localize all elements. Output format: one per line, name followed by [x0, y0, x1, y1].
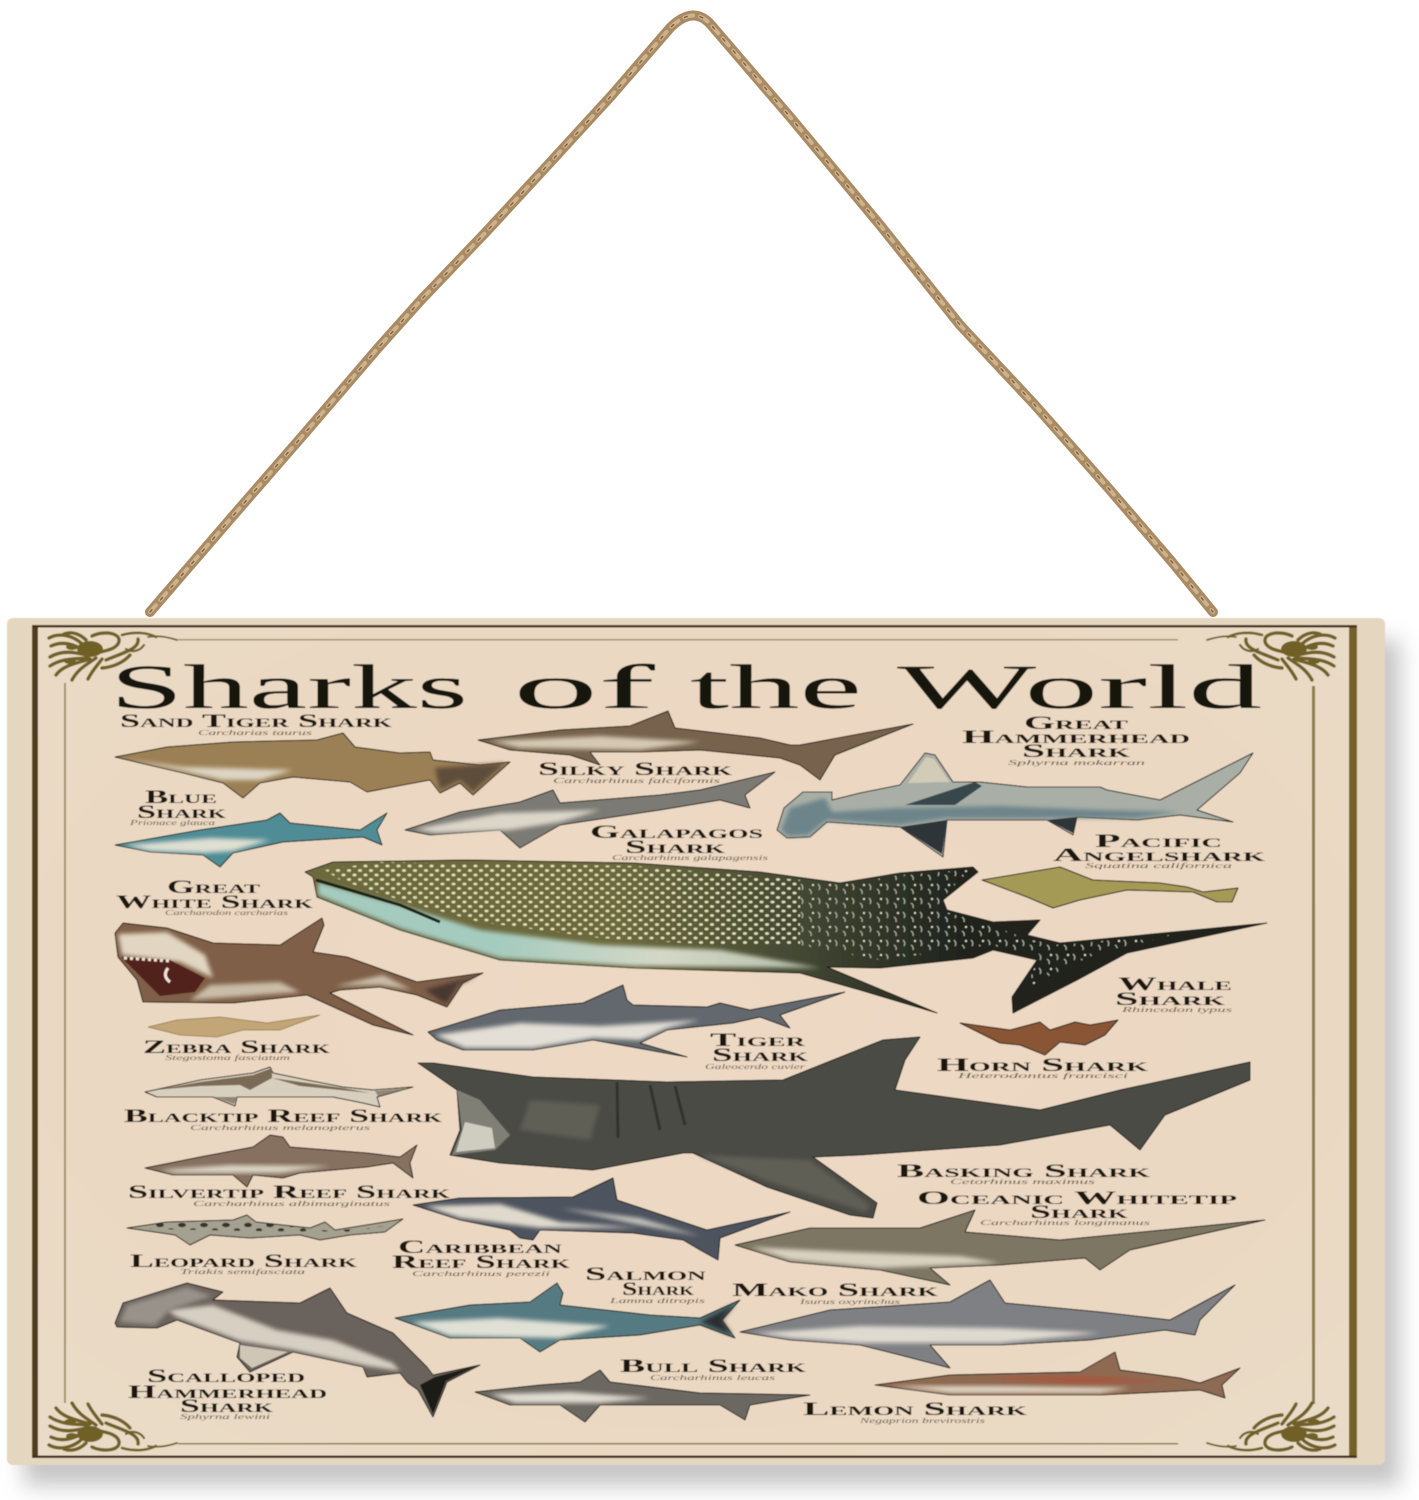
label: salmon shark: Shark	[622, 1279, 695, 1300]
label: silvertip reef shark: Carcharhinus albimarginatus	[193, 1199, 390, 1208]
label: caribbean reef shark	[392, 1237, 572, 1278]
label: basking shark: Cetorhinus maximus	[950, 1177, 1095, 1186]
label: great white shark: Great	[167, 877, 261, 898]
title: World	[897, 652, 1262, 722]
shark: caribbean reef	[413, 1178, 790, 1260]
label: blacktip reef shark: Blacktip Reef Shark	[124, 1106, 444, 1127]
shark: whale	[305, 860, 1267, 1013]
label: caribbean reef shark: Reef Shark	[392, 1252, 572, 1273]
label: blue shark: Blue	[145, 787, 217, 808]
label: sand tiger shark: Carcharias taurus	[198, 728, 312, 737]
label: salmon shark: Lamna ditropis	[608, 1296, 705, 1305]
shark: horn	[960, 1020, 1118, 1055]
label: pacific angelshark: Squatina californica	[1085, 861, 1233, 870]
label: zebra shark	[143, 1037, 332, 1062]
title: the	[690, 652, 862, 722]
label: bull shark: Bull Shark	[620, 1356, 808, 1377]
shark: salmon	[395, 1283, 740, 1352]
label: oceanic whitetip shark: Carcharhinus longimanus	[980, 1218, 1150, 1227]
label: great hammerhead shark: Hammerhead	[962, 727, 1190, 748]
label: caribbean reef shark: Caribbean	[398, 1237, 563, 1258]
label: whale shark: Rhincodon typus	[1120, 1005, 1232, 1014]
corner ornament: top left	[49, 633, 177, 680]
label: lemon shark: Negaprion brevirostris	[858, 1416, 985, 1425]
shark: mako	[740, 1280, 1235, 1368]
label: horn shark	[937, 1055, 1150, 1080]
label: scalloped hammerhead shark: Shark	[180, 1396, 275, 1417]
label: silky shark: Carcharhinus falciformis	[553, 776, 720, 785]
label: leopard shark: Triakis semifasciata	[180, 1267, 306, 1276]
label: basking shark	[897, 1161, 1152, 1186]
label: whale shark: Whale	[1118, 974, 1232, 995]
label: whale shark	[1115, 974, 1232, 1014]
label: scalloped hammerhead shark	[128, 1366, 327, 1421]
label: silky shark: Silky Shark	[538, 759, 734, 780]
shark: leopard	[127, 1215, 403, 1245]
label: great hammerhead shark: Sphyrna mokarran	[1008, 758, 1146, 767]
label: oceanic whitetip shark: Oceanic Whitetip	[917, 1188, 1237, 1209]
label: scalloped hammerhead shark: Sphyrna lewini	[180, 1412, 270, 1421]
label: pacific angelshark: Pacific	[1095, 831, 1222, 852]
label: great white shark: White Shark	[116, 892, 315, 913]
shark: scalloped hammerhead	[115, 1283, 480, 1417]
label: galapagos shark: Carcharhinus galapagensis	[612, 853, 768, 862]
title	[110, 652, 1262, 722]
wooden sign panel	[7, 618, 1385, 1465]
label: blacktip reef shark	[124, 1106, 444, 1132]
corner ornament: bottom right	[1207, 1403, 1335, 1450]
label: pacific angelshark	[1053, 831, 1267, 870]
label: salmon shark: Salmon	[585, 1264, 707, 1285]
label: sand tiger shark	[120, 711, 394, 737]
label: great white shark	[116, 877, 315, 917]
label: sand tiger shark: Sand Tiger Shark	[120, 711, 394, 732]
label: mako shark	[732, 1280, 940, 1306]
shark: silky	[478, 711, 913, 780]
label: mako shark: Isurus oxyrinchus	[798, 1297, 900, 1306]
shark: sand tiger	[115, 733, 510, 798]
label: leopard shark	[130, 1251, 359, 1276]
label: blue shark: Prionace glauca	[128, 818, 215, 827]
label: oceanic whitetip shark	[917, 1188, 1237, 1227]
label: galapagos shark: Shark	[625, 837, 727, 858]
title: of	[513, 652, 655, 722]
label: galapagos shark	[590, 822, 768, 862]
title: Sharks	[110, 652, 468, 722]
label: silky shark	[538, 759, 734, 785]
label: tiger shark: Tiger	[710, 1030, 806, 1051]
label: blacktip reef shark: Carcharhinus melanopterus	[190, 1123, 370, 1132]
label: great hammerhead shark: Shark	[1022, 741, 1132, 762]
label: pacific angelshark: Angelshark	[1053, 845, 1267, 866]
label: tiger shark: Shark	[712, 1045, 810, 1066]
double frame	[32, 625, 1357, 1458]
label: bull shark	[620, 1356, 808, 1382]
label: scalloped hammerhead shark: Scalloped	[147, 1366, 305, 1387]
shark: blue	[115, 813, 387, 867]
label: blue shark	[128, 787, 228, 827]
label: zebra shark: Stegostoma fasciatum	[165, 1053, 291, 1062]
label: great white shark: Carcharodon carcharias	[165, 908, 288, 917]
label: bull shark: Carcharhinus leucas	[650, 1373, 775, 1382]
label: horn shark: Horn Shark	[937, 1055, 1150, 1076]
shark: lemon	[875, 1352, 1240, 1398]
label: lemon shark: Lemon Shark	[803, 1399, 1029, 1420]
label: zebra shark: Zebra Shark	[143, 1037, 332, 1058]
corner ornament: top right	[1207, 633, 1335, 680]
label: whale shark: Shark	[1115, 989, 1227, 1010]
label: basking shark: Basking Shark	[897, 1161, 1152, 1182]
label: oceanic whitetip shark: Shark	[1030, 1202, 1130, 1223]
sign drop shadow	[24, 640, 1400, 1486]
label: silvertip reef shark: Silvertip Reef Shark	[128, 1182, 452, 1203]
shark: tiger	[428, 985, 845, 1057]
corner ornament: bottom left	[49, 1403, 177, 1450]
label: silvertip reef shark	[128, 1182, 452, 1208]
label: salmon shark	[585, 1264, 707, 1305]
label: lemon shark	[803, 1399, 1029, 1425]
label: galapagos shark: Galapagos	[590, 822, 763, 843]
shark: basking	[418, 1037, 1250, 1218]
shark: bull	[475, 1370, 810, 1422]
shark: zebra	[148, 1015, 320, 1037]
label: scalloped hammerhead shark: Hammerhead	[128, 1382, 327, 1403]
shark: great white	[115, 918, 483, 1035]
label: caribbean reef shark: Carcharhinus perezii	[412, 1269, 550, 1278]
shark: pacific angelshark	[982, 867, 1238, 908]
shark: silvertip reef	[145, 1135, 417, 1187]
label: blue shark: Shark	[137, 802, 228, 823]
shark: oceanic whitetip	[735, 1210, 1265, 1285]
label: great hammerhead shark: Great	[1024, 713, 1129, 734]
label: tiger shark: Galeocerdo cuvier	[705, 1062, 805, 1071]
label: horn shark: Heterodontus francisci	[956, 1071, 1128, 1080]
poster paper	[38, 627, 1350, 1456]
shark: blacktip reef	[145, 1067, 413, 1107]
shark: galapagos	[405, 772, 775, 848]
shark: great hammerhead	[777, 753, 1253, 857]
label: great hammerhead shark	[962, 713, 1190, 767]
sign board	[7, 618, 1385, 1465]
hanging rope	[150, 15, 1213, 612]
label: leopard shark: Leopard Shark	[130, 1251, 359, 1272]
label: mako shark: Mako Shark	[732, 1280, 940, 1301]
label: tiger shark	[705, 1030, 810, 1071]
